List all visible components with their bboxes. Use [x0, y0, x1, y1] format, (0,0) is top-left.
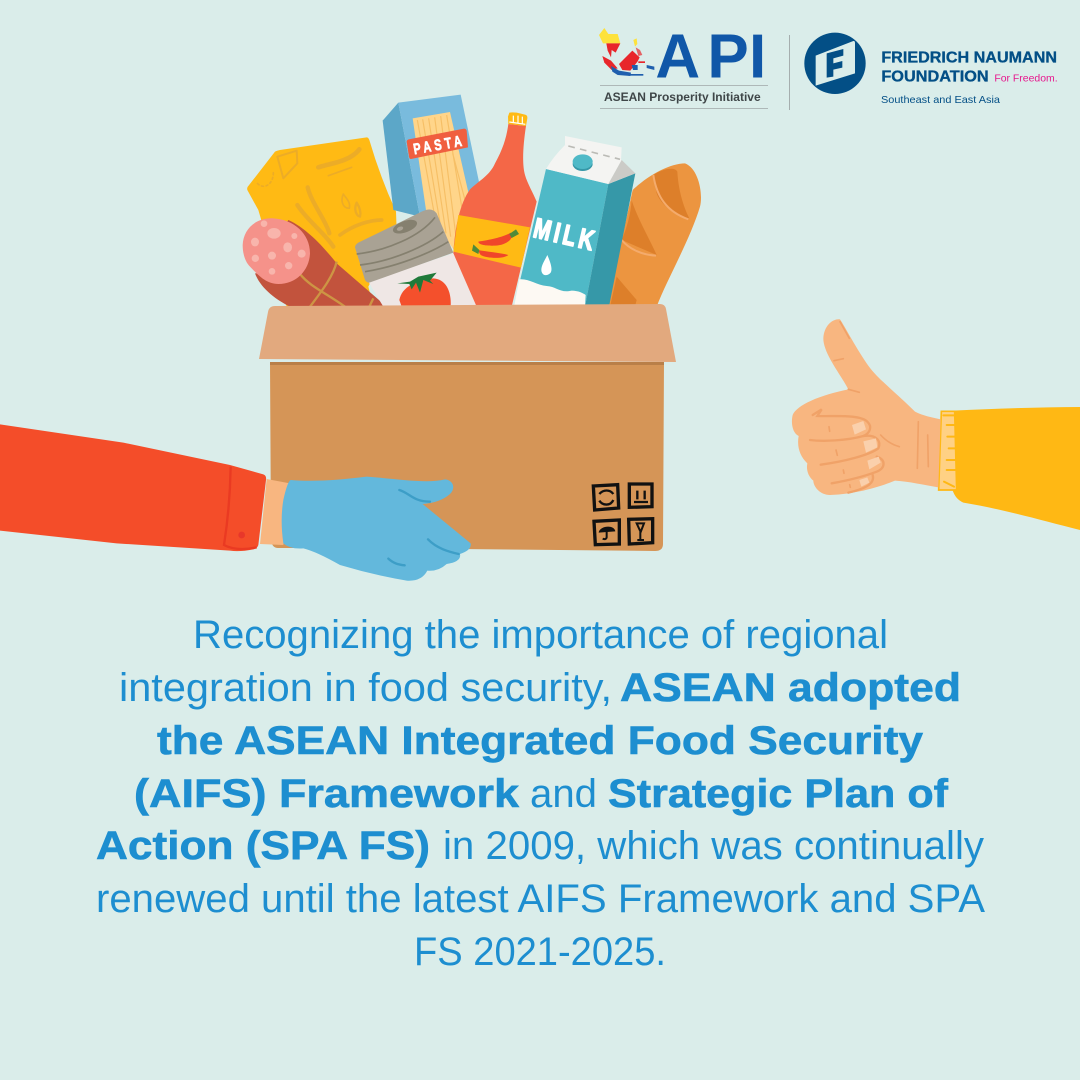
icon: chili peppers: [472, 229, 519, 258]
line 5: Action (SPA FS): [96, 824, 430, 868]
icon: sauce bottle: [453, 112, 537, 307]
icon: blue glove: [282, 477, 471, 581]
icon: tomato can: [355, 210, 477, 307]
icon: tomato: [397, 273, 451, 307]
illustration: thumbs up hand with yellow sleeve: [792, 319, 1080, 530]
wrist: [260, 479, 293, 545]
icon: recycle: [593, 485, 619, 510]
logo subtitle: ASEAN Prosperity Initiative: [604, 91, 761, 104]
region: Southeast and East Asia: [881, 95, 1000, 106]
label: milk: MILK: [530, 213, 597, 257]
icons: handling marks: [593, 484, 653, 545]
illustration: hand in blue glove with red sleeve: [0, 424, 471, 581]
line 6: renewed until the latest AIFS Framework and SPA: [96, 877, 986, 921]
main text block: [96, 613, 986, 974]
logo: ASEAN Prosperity Initiative: [599, 23, 768, 109]
line 2: ASEAN adopted: [620, 666, 961, 710]
illustration: groceries: [243, 95, 701, 307]
tagline: For Freedom.: [994, 73, 1058, 84]
label: pasta: PASTA: [412, 132, 463, 158]
icon: fragile: [629, 519, 653, 544]
line 2: integration in food security,: [119, 666, 612, 710]
hand: [792, 319, 941, 495]
icon: keep dry: [594, 520, 619, 545]
line 7: FS 2021-2025.: [414, 930, 666, 974]
logo: Friedrich Naumann Foundation: [804, 33, 1058, 106]
line 5: in 2009, which was continually: [443, 824, 984, 868]
icon: milk drop: [541, 255, 552, 275]
icon: ASEAN map: [599, 28, 654, 76]
line 4: and: [530, 772, 597, 816]
logo: Friedrich Naumann Foundation: FOUNDATION: [881, 68, 989, 85]
line 3: the ASEAN Integrated Food Security: [157, 719, 923, 763]
icon: F emblem: [804, 33, 866, 94]
line 2: [119, 666, 961, 710]
foundation name: FRIEDRICH NAUMANN: [881, 50, 1057, 67]
icon: pasta box: [383, 95, 480, 250]
wordmark: API: API: [655, 23, 766, 92]
icon: bread loaf: [608, 163, 701, 307]
icon: milk carton: [514, 136, 635, 307]
sleeve: red: [0, 424, 266, 551]
line 1: Recognizing the importance of regional: [193, 613, 888, 657]
icon: salami: [243, 218, 387, 307]
line 5: [96, 824, 984, 868]
icon: yellow cereal pack: [247, 137, 397, 307]
illustration: cardboard box: [259, 304, 676, 551]
line 4: [134, 772, 949, 816]
line 4: (AIFS) Framework: [134, 772, 519, 816]
line 4: Strategic Plan of: [608, 772, 949, 816]
logos header: [599, 23, 1058, 110]
sleeve: yellow: [939, 407, 1080, 530]
icon: this way up: [629, 484, 652, 507]
